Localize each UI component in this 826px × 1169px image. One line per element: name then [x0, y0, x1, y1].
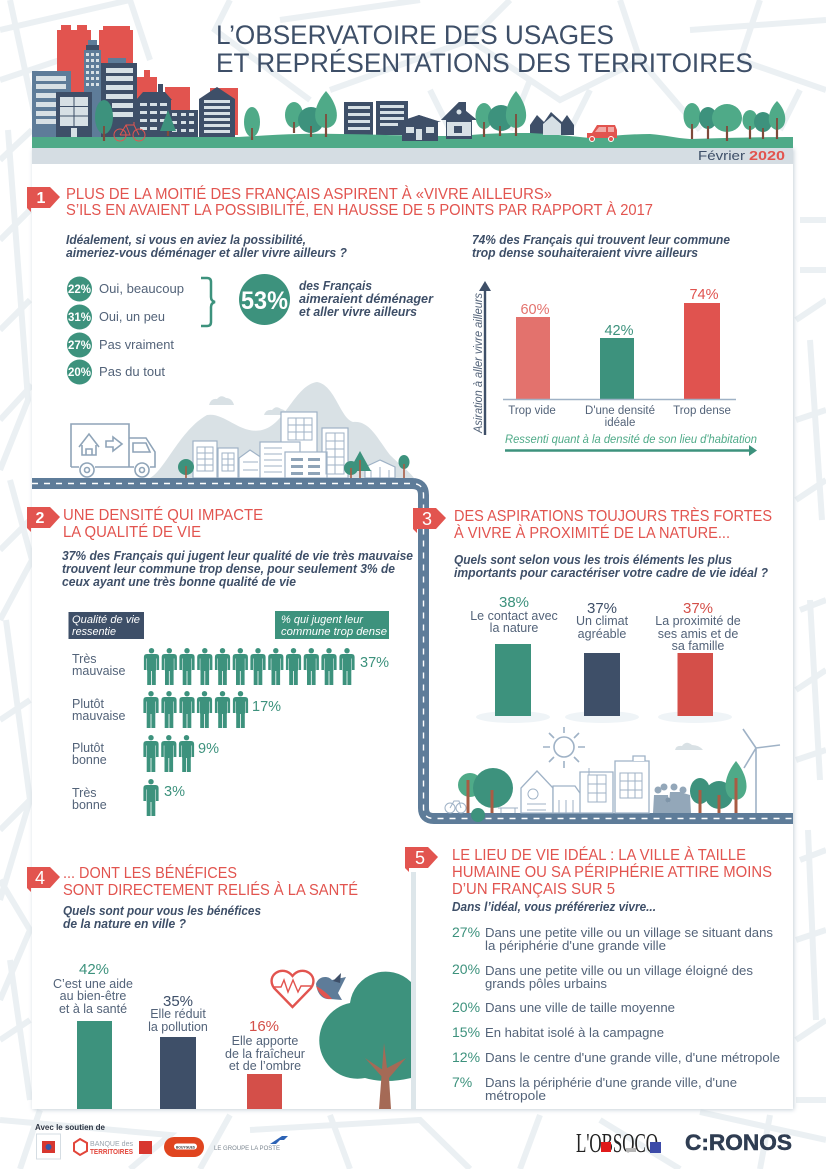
- bar chart: ideal living environment: 37%: [587, 600, 617, 617]
- section 2 heading: UNE DENSITÉ QUI IMPACTE: [63, 507, 263, 524]
- section 1 right heading: 74% des Français qui trouvent leur commune: [472, 233, 730, 247]
- pictogram chart: quality of life: Plutôt: [72, 741, 104, 755]
- callout 53%: et aller vivre ailleurs: [299, 305, 417, 319]
- bar chart: density: Asiration à aller vivre ailleurs: [473, 293, 485, 434]
- divider bar: section 5: [411, 872, 416, 1109]
- date band: 2020: [749, 149, 785, 163]
- sponsors: TERRITOIRES: [90, 1149, 133, 1156]
- bar chart: ideal living environment: 38%: [499, 594, 529, 611]
- bar chart: benefits: [53, 961, 305, 1109]
- answer list: Oui, beaucoup: [99, 282, 184, 296]
- bar chart: benefits: de la fraîcheur: [225, 1047, 305, 1061]
- bar chart: ideal living environment: agréable: [578, 627, 626, 641]
- section 5 heading: HUMAINE OU SA PÉRIPHÉRIE ATTIRE MOINS: [452, 864, 772, 881]
- section 2 statement: 37% des Français qui jugent leur qualité de vie très mauvaise: [62, 549, 413, 563]
- list: preferred living place: 20%: [452, 999, 480, 1015]
- section 3 number flag: [413, 508, 446, 533]
- bar chart: density: Ressenti quant à la densité de son lieu d'habitation: [505, 434, 757, 446]
- pictogram chart: quality of life: Très: [72, 786, 97, 800]
- bar chart: benefits: au bien-être: [60, 989, 126, 1003]
- bar chart: density: 60%: [520, 302, 550, 318]
- section 1 heading: S’ILS EN AVAIENT LA POSSIBILITÉ, EN HAUSSE DE 5 POINTS PAR RAPPORT À 2017: [66, 202, 653, 219]
- answer list: 22%: [68, 284, 91, 296]
- section 2 heading: [63, 507, 263, 541]
- section 1 question: aimeriez-vous déménager et aller vivre ailleurs ?: [66, 246, 347, 260]
- section 3 number flag: 3: [422, 509, 432, 529]
- list: preferred living place: grands pôles urbains: [485, 977, 607, 991]
- section 2 statement: trouvent leur commune trop dense, pour seulement 3% de: [62, 562, 395, 576]
- bar chart: ideal living environment: ses amis et de: [658, 627, 738, 641]
- bar chart: ideal living environment: 37%: [683, 600, 713, 617]
- bar chart: benefits: et à la santé: [59, 1002, 127, 1016]
- bar chart: benefits: C’est une aide: [53, 977, 133, 991]
- road: [32, 484, 793, 818]
- section 2 statement: [62, 549, 413, 589]
- brace: [201, 278, 215, 326]
- section 2 statement: ceux ayant une très bonne qualité de vie: [62, 575, 296, 589]
- logo: L'ObSoCo: L'OBSOCO: [576, 1128, 658, 1158]
- date band: Février: [698, 149, 745, 163]
- bar chart: benefits: 35%: [163, 993, 193, 1010]
- section 4 question: [63, 904, 261, 931]
- section 2 heading: LA QUALITÉ DE VIE: [63, 524, 201, 541]
- bar chart: ideal living environment: [470, 594, 741, 723]
- section 1 right heading: trop dense souhaiteraient vivre ailleurs: [472, 246, 698, 260]
- list: preferred living place: métropole: [485, 1089, 546, 1103]
- section 4 number flag: [27, 867, 60, 892]
- bar chart: ideal living environment: sa famille: [672, 639, 724, 653]
- section 2 number flag: 2: [36, 510, 45, 527]
- callout 53%: aimeraient déménager: [299, 292, 434, 306]
- title: ET REPRÉSENTATIONS DES TERRITOIRES: [216, 48, 753, 78]
- sponsors: BOUYGUES: [176, 1144, 195, 1150]
- section 4 heading: SONT DIRECTEMENT RELIÉS À LA SANTÉ: [63, 882, 358, 899]
- section 5 heading: D’UN FRANÇAIS SUR 5: [452, 881, 615, 898]
- answer list: 27%: [68, 340, 91, 352]
- section 4 question: Quels sont pour vous les bénéfices: [63, 904, 261, 918]
- list: preferred living place: 20%: [452, 961, 480, 977]
- answer list: Pas du tout: [99, 365, 166, 379]
- bar chart: benefits: Elle apporte: [232, 1034, 298, 1048]
- list: preferred living place: Dans une ville de taille moyenne: [485, 1001, 675, 1015]
- section 1 question: [66, 233, 347, 260]
- illustration: sun, town, trees, wind turbine: [445, 727, 780, 822]
- answer list: 31%: [68, 312, 91, 324]
- pictogram chart: quality of life: 17%: [252, 699, 281, 715]
- section 5 heading: [452, 847, 772, 898]
- bar chart: ideal living environment: Le contact avec: [470, 609, 558, 623]
- section 4 number flag: 4: [35, 868, 45, 888]
- sponsors: BANQUE des: [90, 1141, 133, 1148]
- callout 53%: [239, 274, 434, 325]
- list: preferred living place: Dans le centre d'une grande ville, d'une métropole: [485, 1051, 780, 1065]
- section 1 heading: PLUS DE LA MOITIÉ DES FRANÇAIS ASPIRENT À «VIVRE AILLEURS»: [66, 186, 552, 203]
- section 1 right heading: [472, 233, 730, 260]
- section 1 question: Idéalement, si vous en aviez la possibilité,: [66, 233, 306, 247]
- pictogram chart: quality of life: mauvaise: [72, 664, 126, 678]
- bar chart: density: [473, 281, 757, 456]
- illustration: moving truck: [71, 424, 155, 477]
- list: preferred living place: 12%: [452, 1049, 480, 1065]
- answer list: Oui, un peu: [99, 310, 165, 324]
- pictogram chart: quality of life: 3%: [164, 784, 185, 800]
- bar chart: benefits: 16%: [249, 1018, 279, 1035]
- section 1 number flag: [27, 187, 60, 212]
- pictogram chart: quality of life: mauvaise: [72, 709, 126, 723]
- answer list: [67, 276, 184, 384]
- list: preferred living place: 15%: [452, 1024, 480, 1040]
- section 3 question: importants pour caractériser votre cadre de vie idéal ?: [454, 566, 768, 580]
- answer list: 20%: [68, 367, 91, 379]
- section 5 number flag: [405, 847, 438, 872]
- pictogram chart: quality of life: commune trop dense: [281, 626, 387, 638]
- list: preferred living place: la périphérie d'une grande ville: [485, 939, 666, 953]
- pictogram chart: quality of life: bonne: [72, 798, 107, 812]
- bar chart: ideal living environment: Un climat: [576, 614, 629, 628]
- list: preferred living place: Dans une petite ville ou un village éloigné des: [485, 964, 753, 978]
- answer list: Pas vraiment: [99, 338, 175, 352]
- section 5 question: Dans l’idéal, vous préféreriez vivre...: [452, 900, 656, 914]
- section 3 heading: DES ASPIRATIONS TOUJOURS TRÈS FORTES: [454, 508, 772, 525]
- pictogram chart: quality of life: [68, 611, 389, 816]
- section 5 number flag: 5: [415, 848, 425, 868]
- bar chart: ideal living environment: la nature: [490, 621, 538, 635]
- pictogram chart: quality of life: 37%: [360, 655, 389, 671]
- callout 53%: 53%: [241, 287, 288, 315]
- illustration: tree: [319, 972, 411, 1109]
- pictogram chart: quality of life: 9%: [198, 741, 219, 757]
- section 5 heading: LE LIEU DE VIE IDÉAL : LA VILLE À TAILLE: [452, 847, 746, 864]
- logo: L'ObSoCo: [576, 1128, 661, 1158]
- bar chart: density: Trop vide: [508, 405, 556, 417]
- list: preferred living place: Dans une petite ville ou un village se situant dans: [485, 926, 773, 940]
- title: L’OBSERVATOIRE DES USAGES: [216, 20, 614, 50]
- logo: Chronos: C:RONOS: [685, 1130, 792, 1155]
- title: [216, 20, 753, 78]
- list: preferred living place: En habitat isolé à la campagne: [485, 1026, 664, 1040]
- bar chart: ideal living environment: La proximité de: [655, 614, 741, 628]
- section 3 question: Quels sont selon vous les trois éléments les plus: [454, 553, 732, 567]
- section 4 question: de la nature en ville ?: [63, 917, 186, 931]
- bar chart: benefits: 42%: [79, 961, 109, 978]
- panel: white page: [32, 148, 793, 1109]
- section 1 heading: [66, 186, 653, 219]
- bar chart: density: 42%: [604, 323, 634, 339]
- section 3 heading: [454, 508, 772, 542]
- sponsors: LE GROUPE LA POSTE: [214, 1146, 280, 1152]
- sponsors: [35, 1122, 288, 1159]
- section 4 heading: ... DONT LES BÉNÉFICES: [63, 865, 237, 882]
- section 2 number flag: [27, 507, 60, 532]
- bar chart: density: 74%: [689, 287, 719, 303]
- bar chart: density: Trop dense: [673, 405, 731, 417]
- section 3 question: [454, 553, 768, 580]
- bar chart: density: D'une densité: [585, 405, 655, 417]
- callout 53%: des Français: [299, 279, 372, 293]
- icon: bird: [316, 973, 346, 1000]
- icon: heart with pulse: [272, 971, 313, 1007]
- sponsors: Avec le soutien de: [35, 1122, 105, 1132]
- section 3 heading: À VIVRE À PROXIMITÉ DE LA NATURE...: [454, 525, 730, 542]
- pictogram chart: quality of life: ressentie: [72, 626, 116, 638]
- pictogram chart: quality of life: Plutôt: [72, 697, 104, 711]
- pictogram chart: quality of life: % qui jugent leur: [281, 614, 364, 626]
- section 4 heading: [63, 865, 358, 899]
- bar chart: benefits: et de l’ombre: [229, 1059, 301, 1073]
- bar chart: benefits: la pollution: [148, 1020, 208, 1034]
- list: preferred living place: [452, 924, 780, 1103]
- bar chart: density: idéale: [605, 417, 635, 429]
- list: preferred living place: 27%: [452, 924, 480, 940]
- pictogram chart: quality of life: bonne: [72, 753, 107, 767]
- date band: [32, 148, 793, 164]
- bar chart: benefits: Elle réduit: [150, 1007, 206, 1021]
- illustration: city and mountains: [150, 382, 414, 478]
- list: preferred living place: 7%: [452, 1074, 472, 1090]
- illustration: skyline header: [32, 25, 793, 148]
- list: preferred living place: Dans la périphérie d'une grande ville, d'une: [485, 1076, 737, 1090]
- pictogram chart: quality of life: Qualité de vie: [72, 614, 140, 626]
- pictogram chart: quality of life: Très: [72, 652, 97, 666]
- section 1 number flag: 1: [37, 190, 46, 207]
